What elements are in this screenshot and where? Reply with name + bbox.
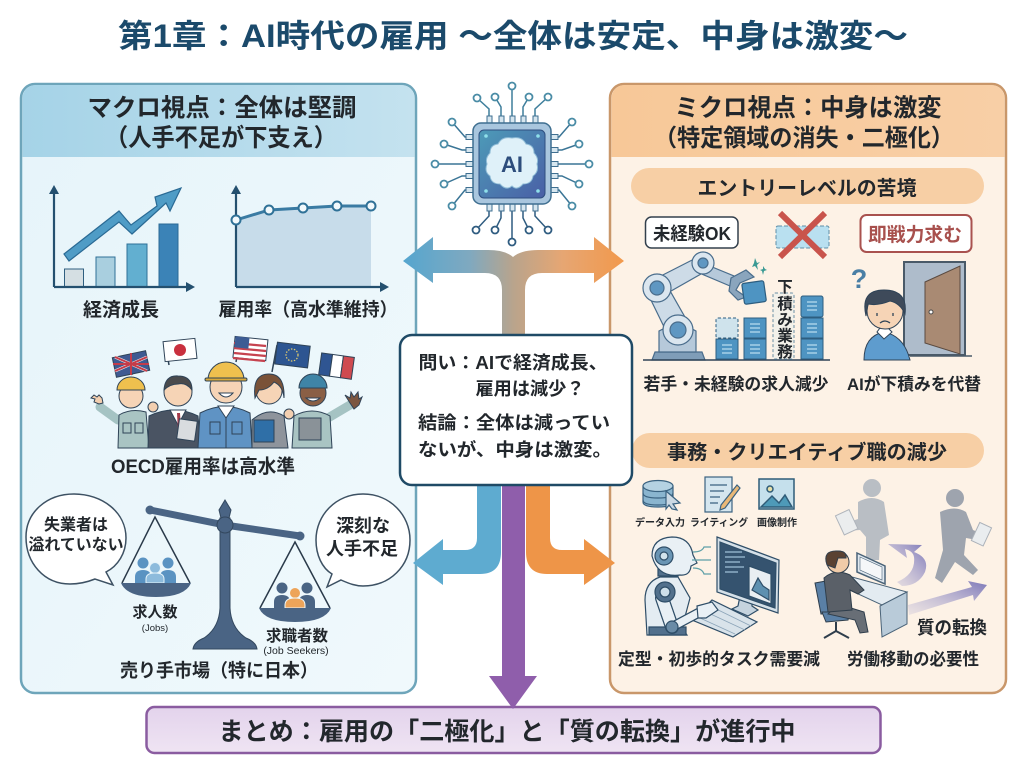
worker 3: blue work wear <box>198 362 252 448</box>
icon: image <box>759 479 794 509</box>
badge: no experience OK: 未経験OK <box>653 224 731 244</box>
micro panel header band <box>612 85 1004 157</box>
label: jobs: 求人数 <box>132 603 178 621</box>
vertical label: groundwork tasks: 積 <box>777 295 793 313</box>
seated worker <box>824 551 868 633</box>
monitor <box>717 537 779 616</box>
macro panel heading: マクロ視点：全体は堅調 <box>88 94 356 122</box>
panel: micro view <box>610 84 1006 693</box>
keyboard <box>692 600 757 637</box>
illustration: balance scale <box>121 500 331 657</box>
vertical label: groundwork tasks: み <box>777 312 793 329</box>
illustration: young job seeker at closed door <box>851 262 972 360</box>
label: jobs <box>132 603 178 634</box>
right pan with seeker icons <box>259 542 331 622</box>
arrow: question splits to both views <box>403 237 624 336</box>
data flow <box>692 547 711 574</box>
arrow: result to micro panel <box>526 484 615 585</box>
vertical label: groundwork tasks <box>777 279 793 361</box>
labels: task types: 画像制作 <box>757 516 797 529</box>
flag: UK <box>112 351 150 377</box>
callout: question and conclusion: ないが、中身は激変。 <box>418 439 612 460</box>
task blocks <box>716 293 823 359</box>
door <box>904 262 972 356</box>
chart: employment rate <box>218 185 398 320</box>
label: job seekers: (Job Seekers) <box>263 645 329 657</box>
icon: AI chip <box>432 82 592 246</box>
subheading pill: entry level: エントリーレベルの苦境 <box>698 177 916 200</box>
icon: AI chip: AI <box>501 152 523 177</box>
subheading pill: clerical and creative: 事務・クリエイティブ職の減少 <box>667 440 947 464</box>
badge: no experience OK <box>646 217 738 248</box>
desk <box>843 553 907 637</box>
chart: economic growth <box>49 185 195 321</box>
robot body <box>645 537 718 635</box>
label: job seekers <box>263 626 329 657</box>
callout: question and conclusion: 結論：全体は減ってい <box>418 412 610 433</box>
brain with AI <box>486 138 538 188</box>
callout: question and conclusion: 雇用は減少？ <box>476 378 584 399</box>
ground line <box>643 359 830 361</box>
vertical label: groundwork tasks: 下 <box>777 279 793 296</box>
icon: data entry <box>643 480 680 510</box>
vertical label: groundwork tasks: 務 <box>777 343 793 361</box>
stand <box>193 500 257 649</box>
chart: employment rate: 雇用率（高水準維持） <box>218 299 398 320</box>
beam <box>150 510 300 536</box>
title: 第1章：AI時代の雇用 〜全体は安定、中身は激変〜 <box>118 18 908 54</box>
circuit nodes <box>432 82 592 246</box>
micro panel heading: （特定領域の消失・二極化） <box>654 125 954 152</box>
flag: USA <box>233 336 268 362</box>
callout: not overflowing with unemployed <box>26 494 126 585</box>
callout: not overflowing with unemployed: 溢れていない <box>28 536 124 554</box>
macro panel heading: （人手不足が下支え） <box>105 123 337 152</box>
caption: labor mobility: 労働移動の必要性 <box>847 650 979 669</box>
icon: writing <box>705 477 740 512</box>
flag: France <box>319 353 354 379</box>
flag: EU <box>272 342 310 372</box>
icon: sparkle <box>752 258 767 275</box>
curved arrow <box>888 544 926 586</box>
arrow: result to macro panel <box>413 484 501 585</box>
summary box <box>146 707 880 753</box>
robot arm reaching keyboard <box>655 582 718 633</box>
callout: not overflowing with unemployed: 失業者は <box>44 516 108 534</box>
labels: task types: ライティング <box>690 516 748 529</box>
circuit traces <box>435 86 589 242</box>
subheading pill: entry level <box>631 168 984 204</box>
arrow: to summary <box>489 484 537 709</box>
callout: question and conclusion: 問い：AIで経済成長、 <box>418 352 608 373</box>
caption: AI replaces groundwork: AIが下積みを代替 <box>847 374 981 394</box>
caption: routine tasks fall: 定型・初歩的タスク需要減 <box>618 650 820 669</box>
vertical label: groundwork tasks: 業 <box>777 327 793 345</box>
summary box: まとめ：雇用の「二極化」と「質の転換」が進行中 <box>218 717 796 746</box>
badge: immediate skills wanted: 即戦力求む <box>868 223 962 246</box>
straight arrow <box>908 581 987 615</box>
text: quality shift: 質の転換 <box>917 618 987 638</box>
text: seller's market: 売り手市場（特に日本） <box>120 660 318 681</box>
robot arm <box>643 252 766 360</box>
left pan with job icons <box>121 517 191 597</box>
labels: task types <box>635 516 797 529</box>
badge: immediate skills wanted <box>860 215 972 252</box>
ghost worker right <box>935 489 992 583</box>
illustration: AI robot at computer <box>645 537 779 637</box>
label: jobs: (Jobs) <box>142 623 168 634</box>
callout: question and conclusion <box>400 335 632 485</box>
caption: fewer youth jobs: 若手・未経験の求人減少 <box>644 374 828 394</box>
macro panel heading <box>88 94 356 152</box>
worker 1: helmet <box>91 377 149 448</box>
micro panel heading: ミクロ視点：中身は激変 <box>674 94 942 122</box>
icon: question mark: ? <box>851 264 867 294</box>
pins <box>466 116 558 211</box>
flag: Japan <box>163 338 197 365</box>
worker 5: dark helmet <box>292 374 362 448</box>
micro panel heading <box>654 94 954 152</box>
label: job seekers: 求職者数 <box>266 626 328 645</box>
text: OECD employment: OECD雇用率は高水準 <box>111 455 295 478</box>
ghost worker left <box>835 479 889 560</box>
icon: crossed out ticket <box>776 213 829 257</box>
chart: economic growth: 経済成長 <box>83 298 159 321</box>
panel: macro view <box>21 84 416 693</box>
person <box>864 290 910 360</box>
worker 2: suit <box>148 376 201 448</box>
worker 4: office <box>252 374 294 448</box>
callout: severe labor shortage: 人手不足 <box>326 539 398 559</box>
illustration: workers shifting roles <box>815 479 992 638</box>
illustration: robot arm stacking tasks <box>643 252 830 361</box>
labels: task types: データ入力 <box>635 516 685 529</box>
illustration: workers with national flags <box>91 336 362 448</box>
subheading pill: clerical and creative <box>632 433 984 468</box>
macro panel header band <box>22 85 414 157</box>
callout: severe labor shortage <box>316 494 410 587</box>
callout: severe labor shortage: 深刻な <box>336 516 390 536</box>
office chair <box>815 581 850 638</box>
